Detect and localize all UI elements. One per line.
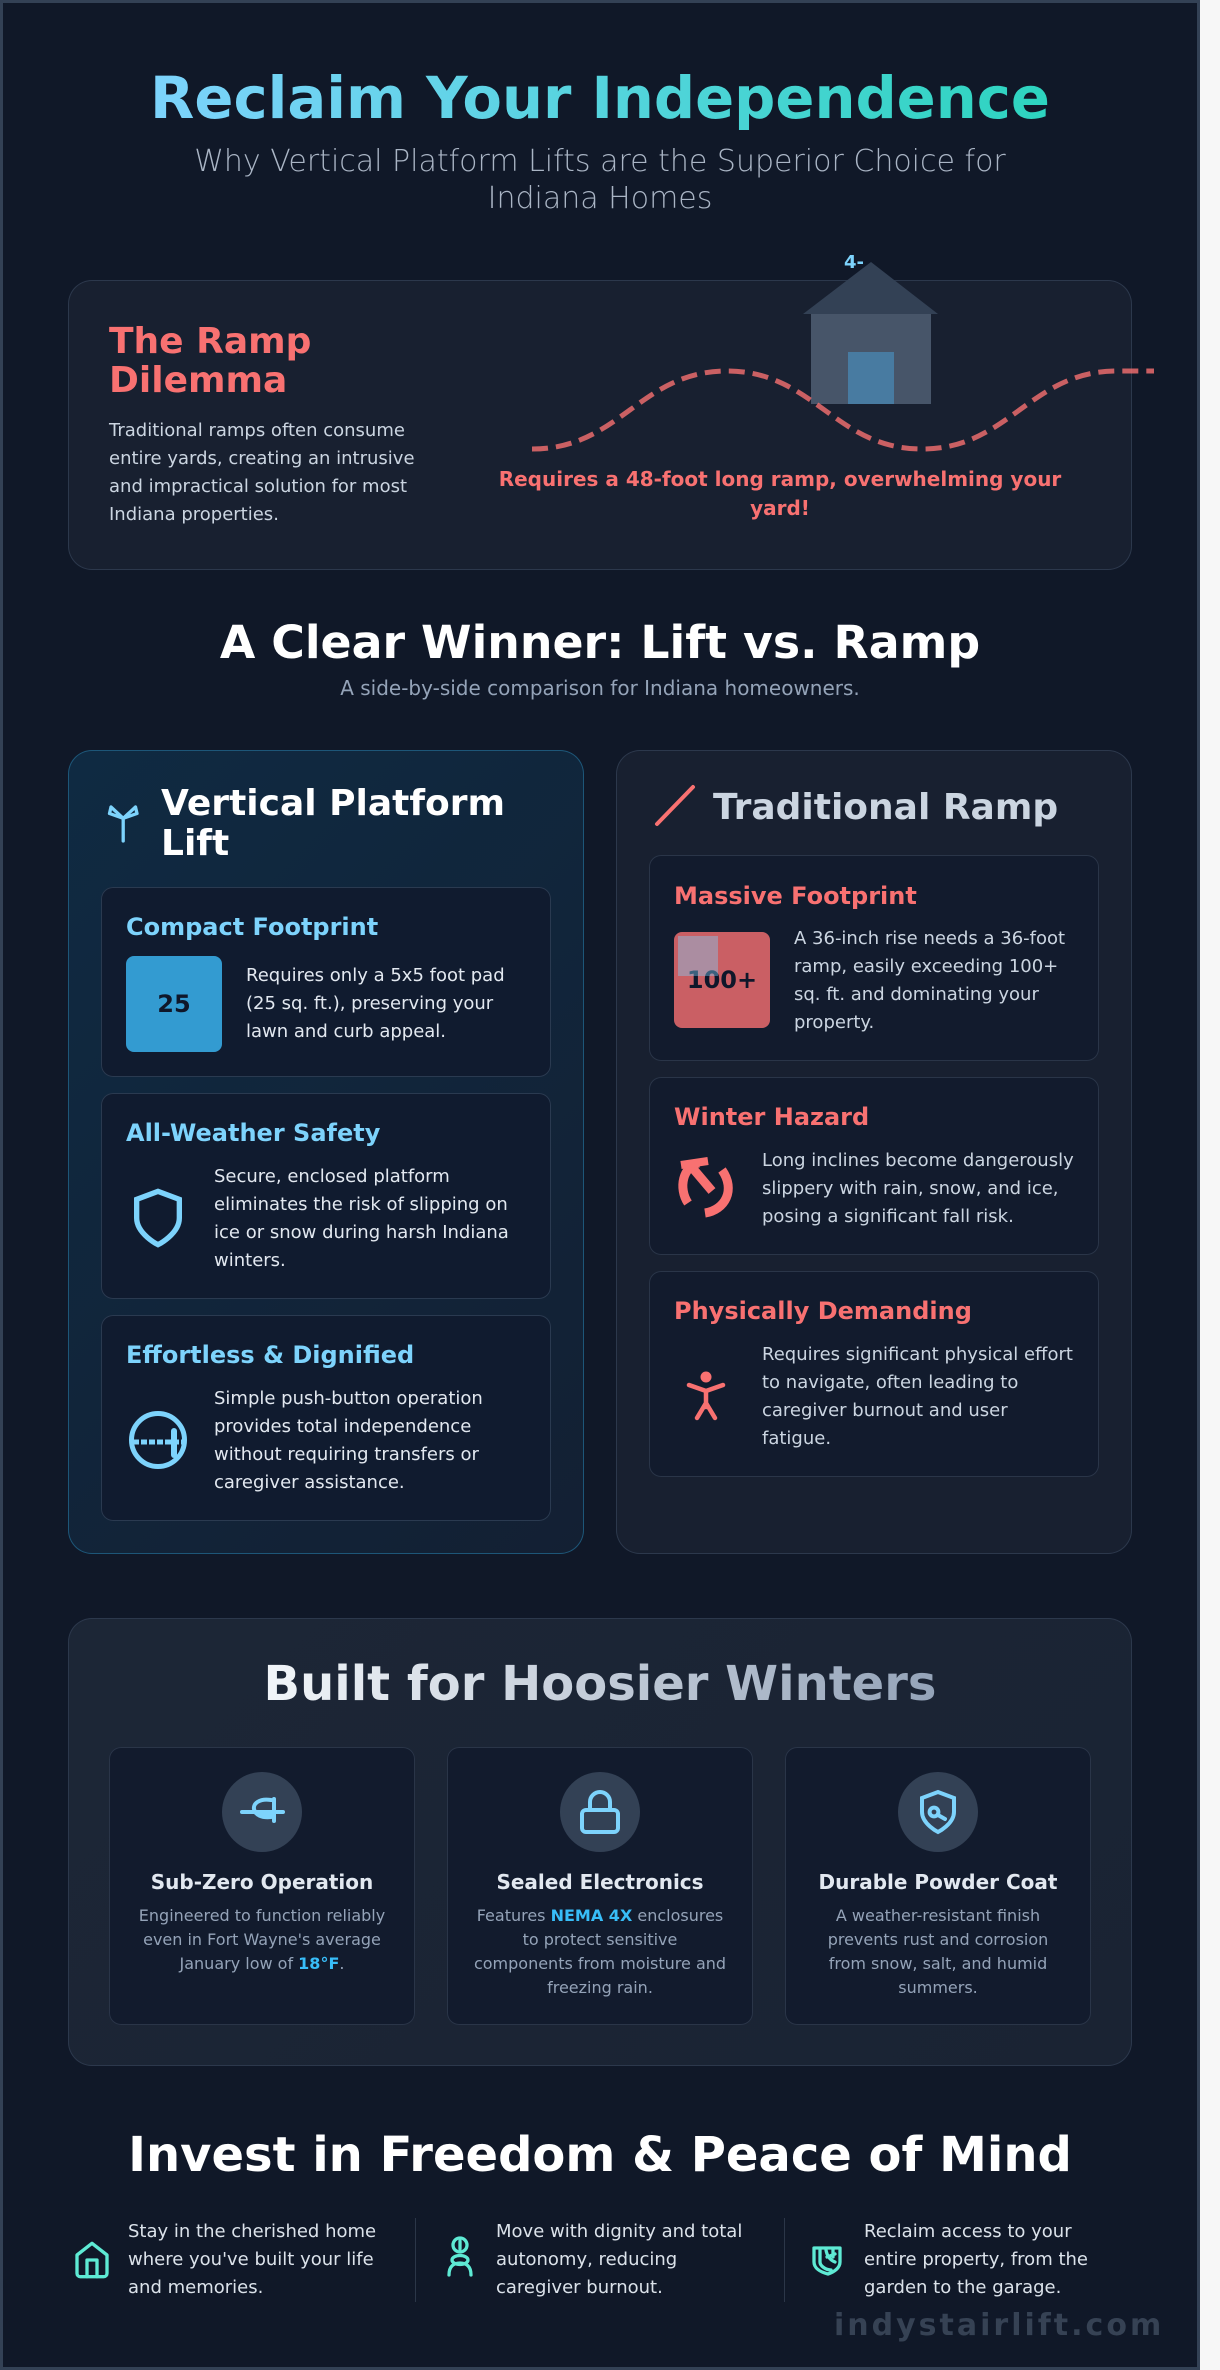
icon: person xyxy=(686,1372,726,1420)
card text: without requiring transfers or xyxy=(214,1444,479,1465)
card title: Winter Hazard xyxy=(674,1103,869,1131)
panel: vertical platform lift xyxy=(68,750,584,1554)
heading: the ramp dilemma: Dilemma xyxy=(109,360,287,401)
card text: Secure, enclosed platform xyxy=(214,1166,450,1187)
ramp dilemma text: Traditional ramps often consume xyxy=(109,420,405,441)
feature text: summers. xyxy=(898,1978,978,1997)
ramp caption: yard! xyxy=(750,496,810,520)
card title: Effortless & Dignified xyxy=(126,1341,414,1369)
card text: sq. ft. and dominating your xyxy=(794,984,1039,1005)
feature text xyxy=(139,1906,385,1973)
feature text: freezing rain. xyxy=(547,1978,653,1997)
heading: the ramp dilemma: The Ramp xyxy=(109,321,311,362)
benefit: home xyxy=(75,2221,376,2298)
feature text xyxy=(474,1906,726,1997)
house xyxy=(803,262,938,404)
feature title: Sealed Electronics xyxy=(496,1870,704,1894)
watermark: indystairlift.com xyxy=(834,2308,1164,2343)
benefit text: garden to the garage. xyxy=(864,2277,1061,2298)
icon: lock xyxy=(560,1772,640,1852)
card: winter hazard xyxy=(649,1077,1099,1255)
section subtitle: comparison: A side-by-side comparison for Indiana homeowners. xyxy=(340,676,860,700)
benefit: property xyxy=(812,2221,1088,2298)
card: massive footprint xyxy=(649,855,1099,1061)
card text: Long inclines become dangerously xyxy=(762,1150,1074,1171)
feature text: even in Fort Wayne's average xyxy=(143,1930,381,1949)
card text: Requires significant physical effort xyxy=(762,1344,1073,1365)
benefit text: autonomy, reducing xyxy=(496,2249,677,2270)
card title: Massive Footprint xyxy=(674,882,917,910)
card text: provides total independence xyxy=(214,1416,471,1437)
benefit text xyxy=(864,2221,1088,2298)
icon: slip hazard xyxy=(678,1157,733,1218)
feature: durable powder coat xyxy=(785,1747,1091,2025)
stat block: 25: 25 xyxy=(157,990,191,1018)
card text xyxy=(246,965,505,1042)
card text: to navigate, often leading to xyxy=(762,1372,1018,1393)
icon: home xyxy=(75,2242,109,2278)
card title: Physically Demanding xyxy=(674,1297,972,1325)
overlay square xyxy=(678,936,718,976)
section heading: comparison: A Clear Winner: Lift vs. Ramp xyxy=(220,615,980,669)
icon: shield with magnifier xyxy=(898,1772,978,1852)
heading: vertical platform lift xyxy=(161,783,505,864)
stat block: 25 xyxy=(126,956,222,1052)
feature text: Engineered to function reliably xyxy=(139,1906,385,1925)
card text: lawn and curb appeal. xyxy=(246,1021,446,1042)
benefit text: Move with dignity and total xyxy=(496,2221,742,2242)
divider xyxy=(784,2218,785,2302)
card text: fatigue. xyxy=(762,1428,831,1449)
panel: built for hoosier winters xyxy=(68,1618,1132,2066)
illustration: house and long ramp xyxy=(532,252,1154,452)
card text: winters. xyxy=(214,1250,286,1271)
feature text: prevents rust and corrosion xyxy=(828,1930,1048,1949)
icon: person xyxy=(447,2236,473,2277)
benefit text: entire property, from the xyxy=(864,2249,1088,2270)
ramp caption xyxy=(499,467,1062,520)
card text: A 36-inch rise needs a 36-foot xyxy=(794,928,1065,949)
ramp dilemma text xyxy=(108,420,415,525)
benefit text: caregiver burnout. xyxy=(496,2277,663,2298)
subtitle: Why Vertical Platform Lifts are the Superior Choice for xyxy=(194,144,1006,179)
ramp dilemma text: entire yards, creating an intrusive xyxy=(109,448,415,469)
heading: built for hoosier winters: Built for Hoosier Winters xyxy=(264,1656,936,1712)
benefit text: Stay in the cherished home xyxy=(128,2221,376,2242)
feature text: January low of 18°F. xyxy=(180,1954,344,1973)
card text: posing a significant fall risk. xyxy=(762,1206,1014,1227)
feature text: A weather-resistant finish xyxy=(836,1906,1040,1925)
feature text xyxy=(828,1906,1048,1997)
icon: garden shield xyxy=(812,2246,842,2276)
subtitle: Indiana Homes xyxy=(488,180,712,216)
ramp dilemma text: and impractical solution for most xyxy=(109,476,407,497)
stat block: 100+ xyxy=(674,932,770,1028)
title: Reclaim Your Independence xyxy=(150,65,1050,132)
card: compact footprint xyxy=(101,887,551,1077)
icon: shield xyxy=(134,1188,182,1248)
card text: eliminates the risk of slipping on xyxy=(214,1194,508,1215)
feature text: to protect sensitive xyxy=(523,1930,677,1949)
ramp dilemma text: Indiana properties. xyxy=(109,504,279,525)
card title: Compact Footprint xyxy=(126,913,378,941)
feature text: components from moisture and xyxy=(474,1954,726,1973)
label: ramp length: 4- xyxy=(844,252,864,273)
feature: sealed electronics xyxy=(447,1747,753,2025)
card text: Requires only a 5x5 foot pad xyxy=(246,965,505,986)
benefit text xyxy=(128,2221,376,2298)
card: effortless and dignified xyxy=(101,1315,551,1521)
card text xyxy=(214,1166,509,1271)
card: all-weather safety xyxy=(101,1093,551,1299)
card text: property. xyxy=(794,1012,874,1033)
panel: the ramp dilemma xyxy=(68,280,1132,570)
section heading: invest: Invest in Freedom & Peace of Mind xyxy=(128,2127,1072,2183)
stat block: 100+: 100+ xyxy=(687,966,757,994)
divider xyxy=(415,2218,416,2302)
icon: ramp line xyxy=(654,784,696,826)
icon: temperature xyxy=(222,1772,302,1852)
card text xyxy=(762,1150,1074,1227)
feature title: Durable Powder Coat xyxy=(819,1870,1057,1894)
dashed ramp curve xyxy=(532,371,1154,449)
card text: caregiver assistance. xyxy=(214,1472,405,1493)
card text: slippery with rain, snow, and ice, xyxy=(762,1178,1059,1199)
icon: lift xyxy=(108,805,139,843)
benefit text: where you've built your life xyxy=(128,2249,374,2270)
panel: traditional ramp xyxy=(616,750,1132,1554)
feature text: from snow, salt, and humid xyxy=(829,1954,1047,1973)
card text: ramp, easily exceeding 100+ xyxy=(794,956,1058,977)
benefit text xyxy=(496,2221,742,2298)
ramp caption: Requires a 48-foot long ramp, overwhelming your xyxy=(499,467,1061,491)
feature: sub-zero operation xyxy=(109,1747,415,2025)
card: physically demanding xyxy=(649,1271,1099,1477)
card text: caregiver burnout and user xyxy=(762,1400,1008,1421)
benefit text: and memories. xyxy=(128,2277,263,2298)
heading: traditional ramp: Traditional Ramp xyxy=(713,787,1058,828)
feature text: Features NEMA 4X enclosures xyxy=(477,1906,723,1925)
heading: vertical platform lift: Lift xyxy=(161,823,229,864)
benefit: dignity xyxy=(447,2221,742,2298)
card text xyxy=(762,1344,1073,1449)
card text: ice or snow during harsh Indiana xyxy=(214,1222,509,1243)
icon: push button xyxy=(129,1411,187,1469)
feature title: Sub-Zero Operation xyxy=(151,1870,373,1894)
card text: Simple push-button operation xyxy=(214,1388,483,1409)
heading: vertical platform lift: Vertical Platform xyxy=(161,783,505,824)
card text: (25 sq. ft.), preserving your xyxy=(246,993,493,1014)
heading: the ramp dilemma xyxy=(109,321,311,401)
card title: All-Weather Safety xyxy=(126,1119,380,1147)
subtitle xyxy=(194,144,1006,216)
card text xyxy=(214,1388,483,1493)
card text xyxy=(794,928,1065,1033)
benefit text: Reclaim access to your xyxy=(864,2221,1072,2242)
